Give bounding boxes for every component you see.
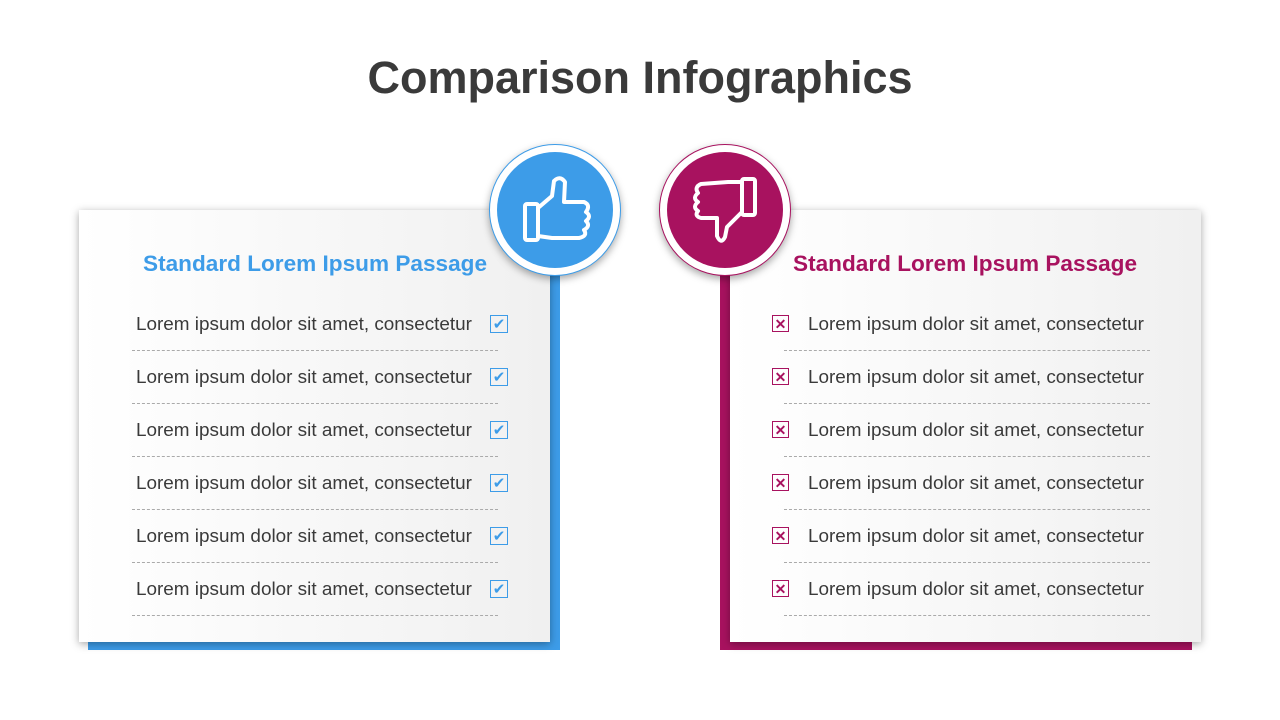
- list: pros: Lorem ipsum dolor sit amet, consectetur: [136, 314, 472, 335]
- list: cons: Lorem ipsum dolor sit amet, consectetur: [808, 367, 1144, 388]
- card: [730, 210, 1201, 642]
- panel: cons: ✕: [775, 368, 786, 384]
- heading: pros: Standard Lorem Ipsum Passage: [143, 251, 487, 276]
- list: pros: Lorem ipsum dolor sit amet, consectetur: [136, 579, 472, 600]
- list: cons: Lorem ipsum dolor sit amet, consectetur: [808, 473, 1144, 494]
- panel: cons: ✕: [775, 422, 786, 438]
- panel: cons: ✕: [775, 474, 786, 490]
- list: pros: Lorem ipsum dolor sit amet, consectetur: [136, 367, 472, 388]
- title: Comparison Infographics: [367, 52, 913, 103]
- panel: pros: ✔: [493, 368, 505, 386]
- list: cons: Lorem ipsum dolor sit amet, consectetur: [808, 314, 1144, 335]
- panel: pros: ✔: [493, 422, 505, 438]
- panel: cons: [654, 142, 1206, 650]
- icon: thumbs down: [659, 144, 791, 276]
- list: pros: [132, 314, 508, 616]
- panel: cons: ✕: [775, 580, 786, 596]
- magenta backing: [720, 275, 1192, 650]
- panel: cons: ✕: [775, 316, 786, 332]
- panel: pros: ✔: [493, 316, 505, 332]
- list: cons: [772, 314, 1150, 616]
- blue backing: [88, 275, 560, 650]
- card: [79, 210, 550, 642]
- list: cons: Lorem ipsum dolor sit amet, consectetur: [808, 420, 1144, 441]
- panel: pros: ✔: [493, 580, 505, 598]
- panel: pros: ✔: [493, 474, 505, 492]
- list: pros: Lorem ipsum dolor sit amet, consectetur: [136, 420, 472, 441]
- icon: thumbs up: [489, 144, 621, 276]
- list: cons: Lorem ipsum dolor sit amet, consectetur: [808, 526, 1144, 547]
- heading: cons: Standard Lorem Ipsum Passage: [793, 251, 1137, 276]
- panel: cons: ✕: [775, 528, 786, 544]
- list: pros: Lorem ipsum dolor sit amet, consectetur: [136, 473, 472, 494]
- list: pros: Lorem ipsum dolor sit amet, consectetur: [136, 526, 472, 547]
- panel: pros: ✔: [493, 528, 505, 544]
- panel: pros: [74, 142, 626, 650]
- list: cons: Lorem ipsum dolor sit amet, consectetur: [808, 579, 1144, 600]
